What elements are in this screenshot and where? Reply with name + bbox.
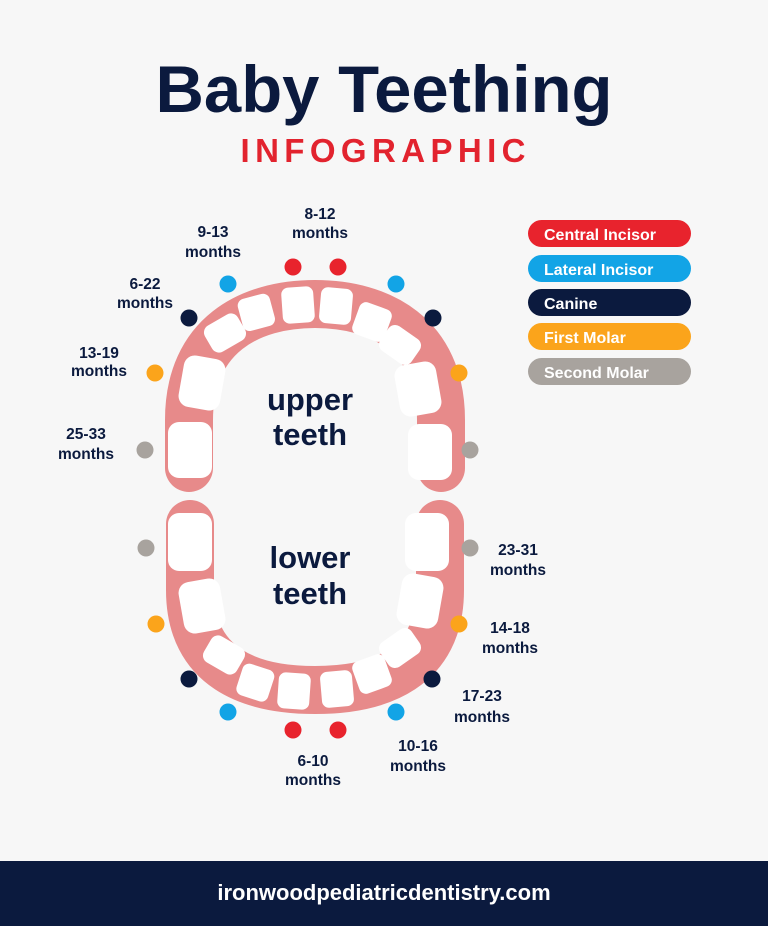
title: [156, 52, 612, 169]
month labels: months: [185, 244, 241, 261]
month labels: 6-10: [297, 753, 329, 770]
arch labels: lower: [270, 540, 350, 575]
month labels: 8-12: [304, 206, 336, 223]
month labels: months: [454, 709, 510, 726]
legend: First Molar: [544, 330, 626, 347]
legend: Second Molar: [544, 365, 649, 382]
arch labels: [267, 382, 353, 611]
month labels: months: [71, 363, 127, 380]
month labels: 25-33: [66, 426, 106, 443]
month labels: 10-16: [398, 738, 438, 755]
footer: ironwoodpediatricdentistry.com: [217, 880, 551, 905]
month labels: 9-13: [197, 224, 229, 241]
month labels: [58, 206, 546, 789]
arch labels: teeth: [273, 417, 347, 452]
lower arch: [168, 513, 449, 710]
month labels: months: [58, 446, 114, 463]
legend: Canine: [544, 296, 597, 313]
legend: [528, 220, 691, 385]
month labels: 6-22: [129, 276, 161, 293]
month labels: months: [482, 640, 538, 657]
subtitle: INFOGRAPHIC: [240, 132, 526, 169]
upper arch: [168, 286, 452, 480]
eruption dots: [136, 258, 478, 738]
month labels: 13-19: [79, 345, 119, 362]
legend: Central Incisor: [544, 227, 656, 244]
legend: Lateral Incisor: [544, 262, 653, 279]
arch labels: teeth: [273, 576, 347, 611]
title: Baby Teething: [156, 52, 612, 126]
month labels: 23-31: [498, 542, 538, 559]
month labels: 17-23: [462, 688, 502, 705]
month labels: months: [390, 758, 446, 775]
month labels: months: [117, 295, 173, 312]
arch labels: upper: [267, 382, 353, 417]
month labels: 14-18: [490, 620, 530, 637]
footer: [0, 861, 768, 926]
month labels: months: [490, 562, 546, 579]
month labels: months: [285, 772, 341, 789]
month labels: months: [292, 225, 348, 242]
